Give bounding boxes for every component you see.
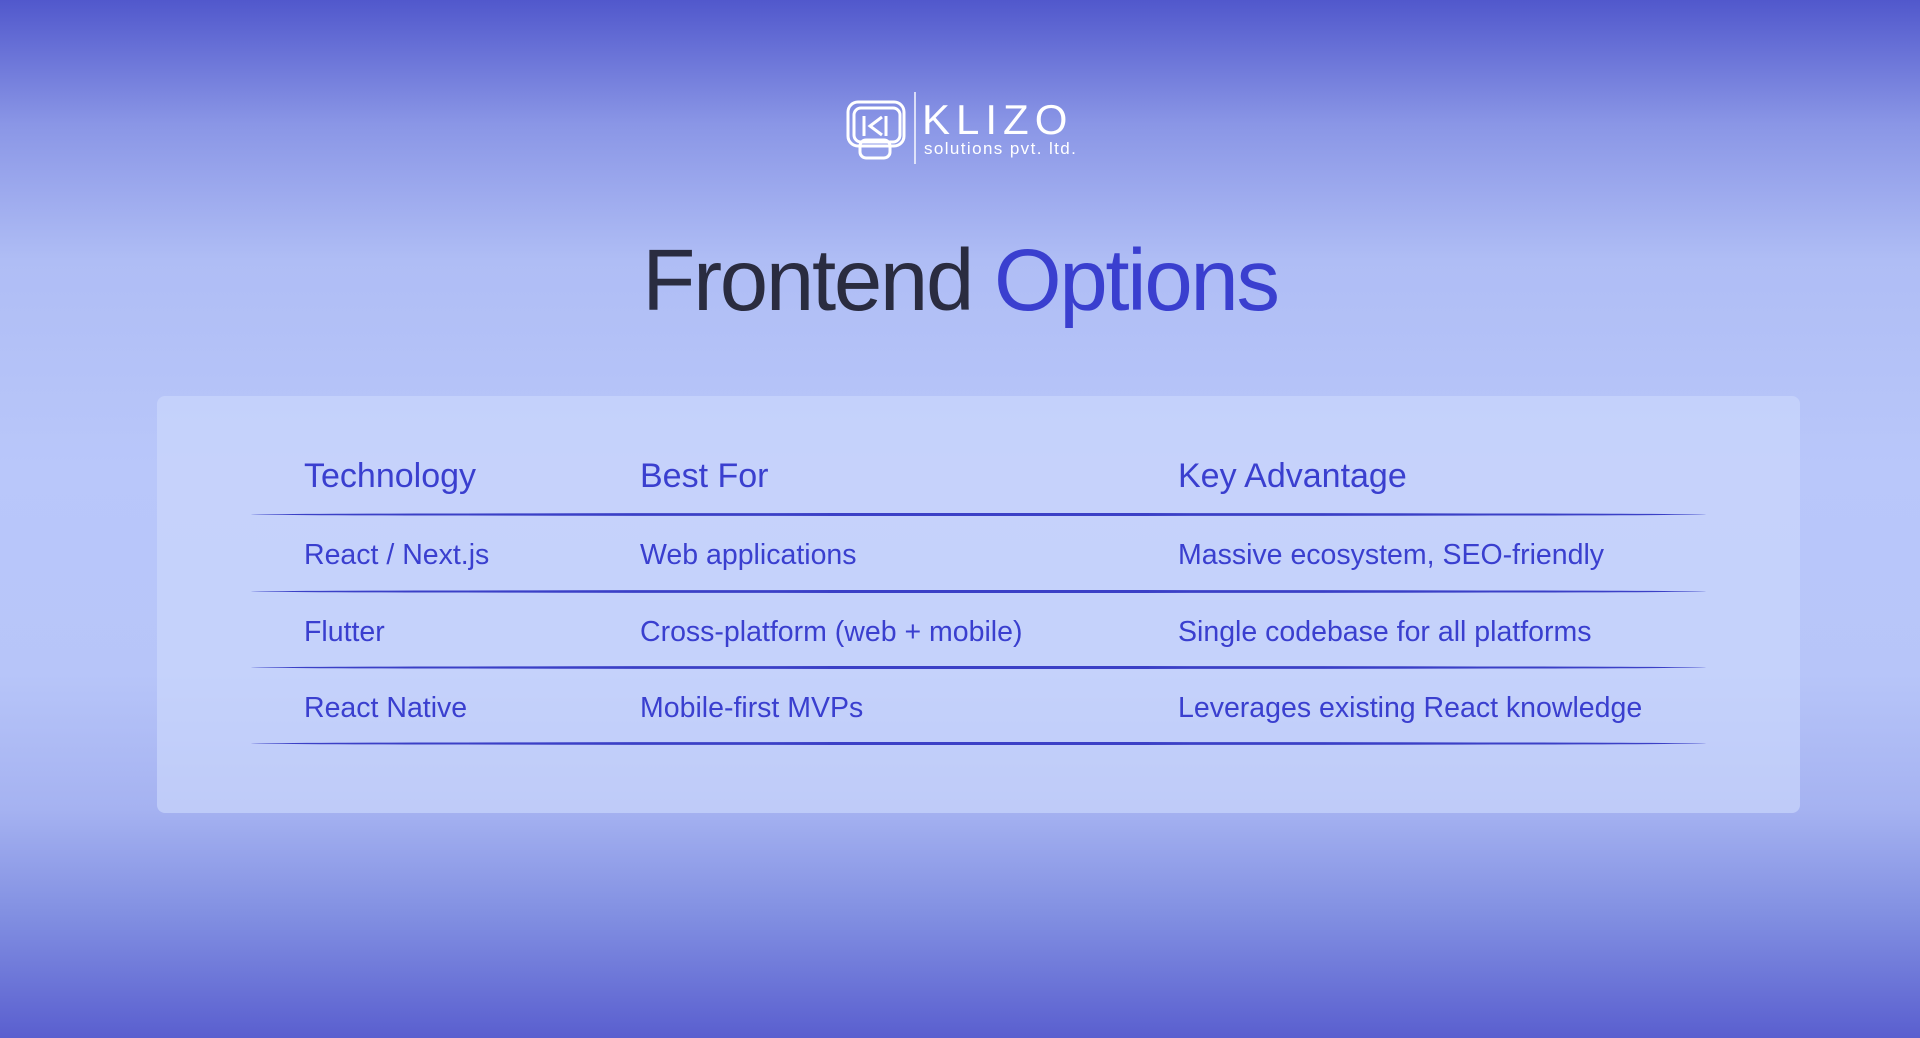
row: Flutter: Single codebase for all platforms bbox=[1178, 616, 1591, 648]
row: React / Next.js: Massive ecosystem, SEO-friendly bbox=[1178, 539, 1604, 571]
table header: Best For bbox=[640, 457, 768, 495]
row: Flutter bbox=[304, 616, 1591, 648]
row: React Native: Leverages existing React knowledge bbox=[1178, 692, 1642, 724]
logo text: KLIZO bbox=[922, 96, 1073, 143]
logo: solutions pvt. ltd. bbox=[924, 139, 1077, 158]
row: Flutter: Flutter bbox=[304, 616, 385, 648]
table header: Key Advantage bbox=[1178, 457, 1407, 495]
table header bbox=[304, 457, 1407, 495]
row: React Native: Mobile-first MVPs bbox=[640, 692, 863, 724]
title: Frontend Options bbox=[642, 232, 1278, 329]
table header: Technology bbox=[304, 457, 476, 495]
logo bbox=[846, 92, 1077, 164]
row: Flutter: Cross-platform (web + mobile) bbox=[640, 616, 1022, 648]
row: React / Next.js: Web applications bbox=[640, 539, 857, 571]
row: React / Next.js bbox=[304, 539, 1604, 571]
icon: logo mark bbox=[846, 100, 906, 160]
panel: table bbox=[157, 396, 1800, 813]
row: React Native bbox=[304, 692, 1642, 724]
row: React Native: React Native bbox=[304, 692, 467, 724]
row: React / Next.js: React / Next.js bbox=[304, 539, 489, 571]
